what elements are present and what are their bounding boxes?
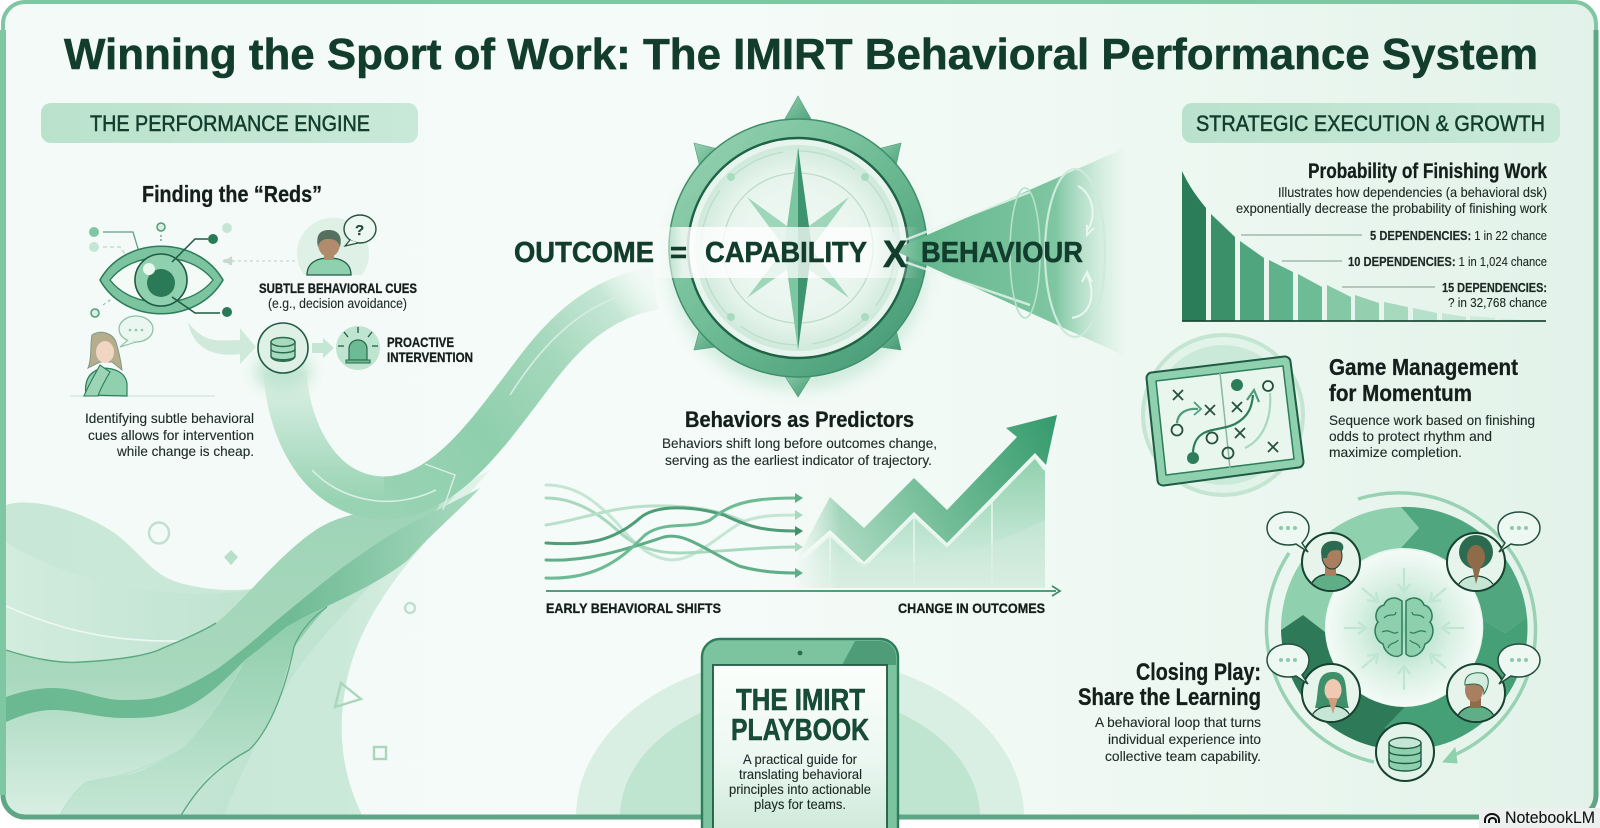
chart callouts: dependencies xyxy=(1348,228,1547,310)
label: proactive intervention: INTERVENTION xyxy=(387,350,473,365)
tablet description: principles into actionable xyxy=(729,781,871,797)
equation: outcome = capability x behaviour: OUTCOME xyxy=(514,237,654,269)
watermark: notebooklm: NotebookLM xyxy=(1505,808,1595,827)
text: closing play: A behavioral loop that turns xyxy=(1095,714,1261,730)
heading and text: behaviors as predictors xyxy=(662,407,937,468)
text: probability of finishing work: Illustrates how dependencies (a behavioral dsk) xyxy=(1278,184,1547,200)
axis labels: EARLY BEHAVIORAL SHIFTS xyxy=(546,600,721,616)
text: identifying subtle cues xyxy=(85,410,254,459)
avatar: woman bottom left xyxy=(1302,664,1360,722)
text: game management for momentum: Game Management xyxy=(1329,354,1518,380)
panel: compass equation xyxy=(514,96,1125,397)
text: probability of finishing work: exponentially decrease the probability of finishing work xyxy=(1236,200,1548,216)
equation: outcome = capability x behaviour: CAPABILITY xyxy=(705,237,867,269)
diagram: share the learning loop xyxy=(1267,493,1540,781)
panel: strategic execution and growth xyxy=(1078,103,1560,781)
text: closing play: individual experience into xyxy=(1108,731,1261,747)
bar chart: probability decay xyxy=(1182,171,1546,321)
text: game management for momentum: Sequence work based on finishing xyxy=(1329,412,1535,428)
ribbon connecting the engine to the compass xyxy=(285,288,655,510)
text: closing play: Share the Learning xyxy=(1078,684,1261,711)
axis labels: CHANGE IN OUTCOMES xyxy=(898,600,1045,616)
equation: outcome = capability x behaviour: BEHAVIOUR xyxy=(921,237,1083,269)
loop outer arrow ring xyxy=(1267,493,1536,763)
bottom-left flowing waves xyxy=(6,470,490,817)
chart: behavioral shift lines xyxy=(546,485,803,578)
arrow: cue to eye xyxy=(222,257,295,265)
text: game management for momentum: for Momentum xyxy=(1329,380,1472,406)
center glow xyxy=(1326,550,1482,706)
text: game management for momentum xyxy=(1329,354,1535,460)
tablet description: plays for teams. xyxy=(754,796,846,812)
tablet body xyxy=(702,639,898,828)
avatar: man top left xyxy=(1302,533,1360,592)
axis labels xyxy=(546,600,1045,616)
equation: outcome = capability x behaviour: = xyxy=(670,237,687,269)
text: probability of finishing work: Probability of Finishing Work xyxy=(1308,160,1547,183)
equation: outcome = capability x behaviour xyxy=(514,234,1083,276)
panel: behaviors as predictors xyxy=(546,407,1060,616)
heading pill: the performance engine: THE PERFORMANCE ENGINE xyxy=(90,111,370,136)
tablet title: PLAYBOOK xyxy=(731,712,869,747)
label: proactive intervention: PROACTIVE xyxy=(387,335,454,350)
avatar: man bottom right xyxy=(1447,664,1505,722)
heading pill: strategic execution xyxy=(1182,103,1560,143)
heading and text: behaviors as predictors: Behaviors as Predictors xyxy=(685,407,914,432)
equation: outcome = capability x behaviour: X xyxy=(883,234,908,276)
text: identifying subtle cues: Identifying subtle behavioral xyxy=(85,410,254,426)
icon: database node xyxy=(1376,723,1434,781)
text: game management for momentum: odds to protect rhythm and xyxy=(1329,428,1492,444)
label: subtle behavioral cues: (e.g., decision avoidance) xyxy=(268,296,407,311)
icon: eye with data points xyxy=(89,223,232,317)
panel: the imirt playbook tablet xyxy=(702,639,898,828)
text: closing play xyxy=(1078,659,1261,764)
chart callouts: dependencies: 10 DEPENDENCIES: 1 in 1,024 chance xyxy=(1348,254,1547,269)
icon: thinking woman xyxy=(70,316,215,396)
inward arrows xyxy=(1344,568,1464,690)
text: game management for momentum: maximize completion. xyxy=(1329,444,1462,460)
timeline axis xyxy=(546,586,1060,596)
icon: man with question bubble: ? xyxy=(355,222,364,239)
text: identifying subtle cues: while change is cheap. xyxy=(116,443,254,459)
text: identifying subtle cues: cues allows for intervention xyxy=(88,427,254,443)
icon: database circle xyxy=(255,323,311,390)
heading and text: behaviors as predictors: serving as the earliest indicator of trajectory. xyxy=(665,452,932,468)
chart callouts: dependencies: 5 DEPENDENCIES: 1 in 22 chance xyxy=(1370,228,1547,243)
icon: man with question bubble xyxy=(297,215,376,275)
chart callouts: dependencies: 15 DEPENDENCIES: xyxy=(1442,280,1547,295)
speech bubbles xyxy=(1267,512,1540,684)
tablet description: A practical guide for xyxy=(743,751,857,767)
text: closing play: Closing Play: xyxy=(1136,659,1261,686)
loop segments xyxy=(1281,507,1528,750)
heading pill: the performance engine xyxy=(41,103,418,143)
icon: game plan board xyxy=(1143,335,1303,495)
beam cone with feedback rings xyxy=(893,148,1125,356)
tablet title: THE IMIRT xyxy=(736,682,865,717)
text: probability of finishing work xyxy=(1236,160,1548,216)
text: closing play: collective team capability. xyxy=(1105,748,1261,764)
translucent equation band xyxy=(650,227,920,278)
tablet description xyxy=(729,751,871,812)
label: subtle behavioral cues xyxy=(259,281,417,311)
label: proactive intervention xyxy=(387,335,473,365)
avatar: woman top right xyxy=(1447,533,1505,592)
heading pill: strategic execution: STRATEGIC EXECUTION & GROWTH xyxy=(1196,111,1545,136)
chart: outcome area with rising arrow xyxy=(796,415,1057,590)
chart callouts: dependencies: ? in 32,768 chance xyxy=(1448,295,1547,310)
decorative shapes xyxy=(149,522,415,759)
heading: finding the reds: Finding the “Reds” xyxy=(142,181,322,207)
arrow: database to intervention xyxy=(312,338,334,358)
icon: compass xyxy=(669,96,927,397)
playbook backdrop arcs xyxy=(576,672,1024,814)
title: Winning the Sport of Work: The IMIRT Behavioral Performance System xyxy=(64,30,1538,79)
panel: the performance engine xyxy=(41,103,473,459)
label: subtle behavioral cues: SUBTLE BEHAVIORAL CUES xyxy=(259,281,417,296)
arrow: eye to database xyxy=(188,322,256,364)
tablet title xyxy=(731,682,869,747)
tablet description: translating behavioral xyxy=(739,766,862,782)
heading and text: behaviors as predictors: Behaviors shift long before outcomes change, xyxy=(662,435,937,451)
icon: brain xyxy=(1375,598,1433,656)
icon: alarm bell xyxy=(336,326,380,370)
